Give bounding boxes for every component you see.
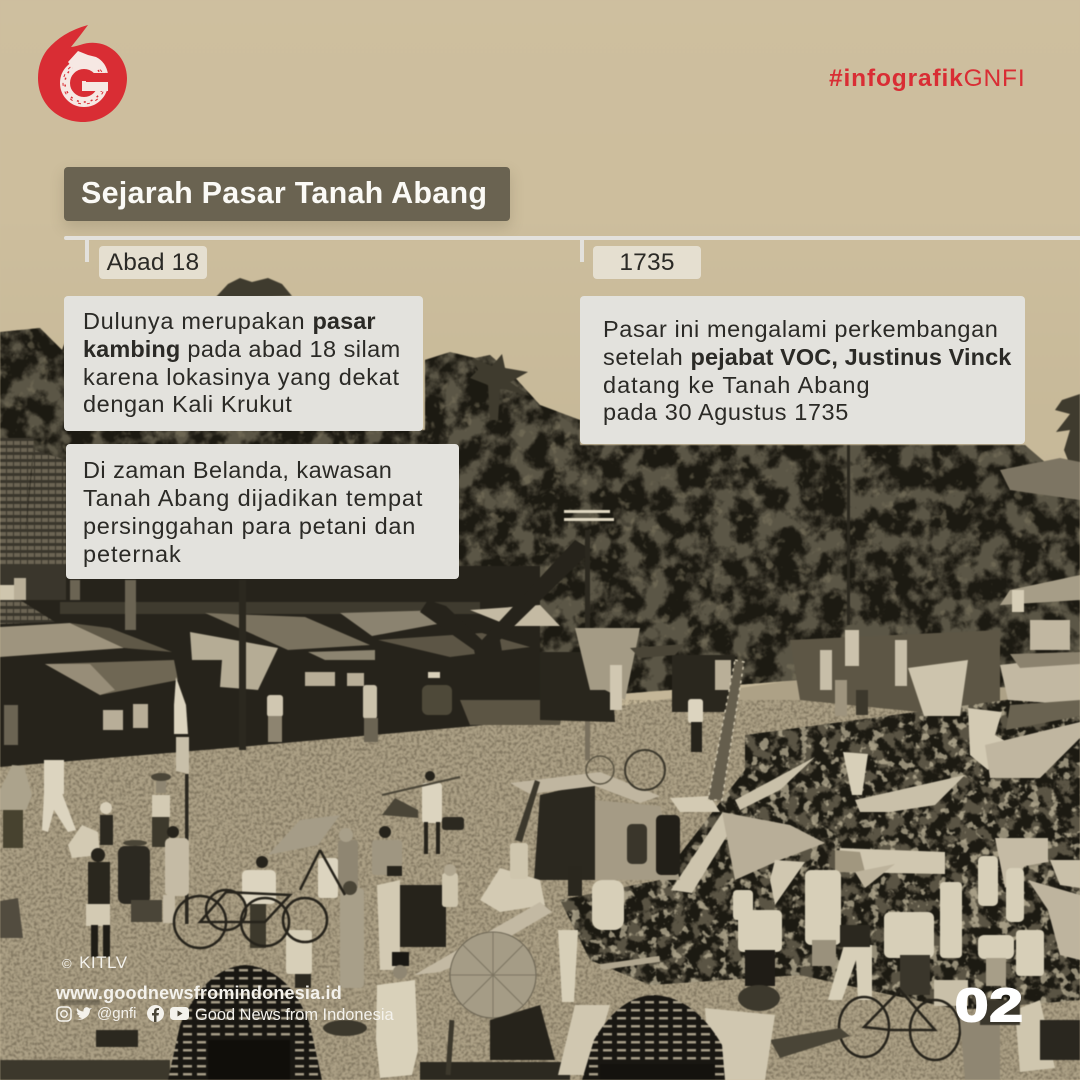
man shirtless xyxy=(91,848,105,862)
title banner xyxy=(64,167,510,221)
group at rack xyxy=(318,858,338,898)
icon: instagram xyxy=(56,1006,72,1022)
distant roof right xyxy=(1000,458,1080,500)
market group behind xyxy=(442,873,458,907)
man in robe and black peci xyxy=(376,952,418,1078)
timeline rail xyxy=(64,236,1080,262)
man at bottom right xyxy=(960,1000,1080,1080)
icon: twitter xyxy=(76,1007,92,1020)
people, left foreground xyxy=(0,750,545,988)
person under parasol xyxy=(490,1005,555,1060)
text card: zaman Belanda: persinggahan para petani dan xyxy=(83,513,416,539)
cart panels xyxy=(558,1005,775,1080)
man in long robe xyxy=(387,866,402,876)
text card: Justinus Vinck: pada 30 Agustus 1735 xyxy=(603,399,849,425)
ground xyxy=(0,640,1080,1080)
text card: pasar kambing: Dulunya merupakan pasar xyxy=(83,308,376,334)
date tag: 1735 xyxy=(593,246,701,279)
poles xyxy=(239,445,850,760)
walking man in white xyxy=(50,750,60,760)
bicycles at centre-left xyxy=(174,850,345,948)
icon: youtube xyxy=(170,1007,189,1020)
stall awnings row xyxy=(0,605,560,695)
man in dark coat xyxy=(118,846,150,904)
stall table xyxy=(400,885,446,947)
squatting man xyxy=(68,825,100,858)
foreground people, right xyxy=(558,856,1044,1006)
people standing before the left shops xyxy=(267,672,565,742)
date tag: 1735: 1735 xyxy=(619,249,675,276)
text card: pasar kambing: karena lokasinya yang dekat xyxy=(83,364,400,390)
box and bucket xyxy=(0,898,23,938)
carrier with yoke xyxy=(425,771,435,781)
eagle ring xyxy=(63,51,108,104)
man with pith helmet xyxy=(100,802,112,814)
text card: pasar kambing: dengan Kali Krukut xyxy=(83,391,292,417)
hashtag header: #infografikGNFI xyxy=(829,65,1026,92)
palms xyxy=(215,278,1080,474)
text card: pasar kambing: kambing pada abad 18 silam xyxy=(83,336,401,362)
channel name: Good News from Indonesia xyxy=(195,1006,394,1024)
hats ground parasol sketch xyxy=(268,815,340,855)
tree canopy masses xyxy=(0,328,1080,700)
text card: Justinus Vinck: setelah pejabat VOC, Justinus Vinck xyxy=(603,344,1011,370)
social media row xyxy=(56,1005,394,1024)
parasol xyxy=(414,902,552,1075)
people in the left shopfronts xyxy=(4,672,364,745)
bicycle, lower right xyxy=(839,990,960,1060)
ground shadows xyxy=(0,1000,570,1080)
text card: pasar kambing xyxy=(64,296,423,431)
text card: zaman Belanda xyxy=(66,444,459,579)
veiled woman xyxy=(0,765,32,810)
text card: zaman Belanda: Di zaman Belanda, kawasan xyxy=(83,457,392,483)
tents and tarps, right xyxy=(670,652,1080,960)
title text: Sejarah Pasar Tanah Abang xyxy=(81,176,487,210)
page number: 02 xyxy=(955,979,1024,1031)
white flag and sign xyxy=(174,677,189,924)
person by lamp post xyxy=(688,699,703,752)
tent and stall with bicycle xyxy=(510,750,680,896)
man with wide hat xyxy=(151,773,171,781)
right background crowd and dark masses xyxy=(540,575,1080,722)
text card: Justinus Vinck xyxy=(580,296,1025,444)
icon: facebook xyxy=(147,1005,164,1022)
text card: Justinus Vinck: Pasar ini mengalami perkembangan xyxy=(603,316,998,342)
handle text: @gnfi xyxy=(97,1005,136,1022)
website url: www.goodnewsfromindonesia.id xyxy=(56,983,342,1003)
tree trunk xyxy=(420,540,592,685)
text card: Justinus Vinck: datang ke Tanah Abang xyxy=(603,372,871,398)
photo credit: © KITLV xyxy=(62,953,128,972)
logo: GNFI red emblem xyxy=(38,25,127,122)
man with white shirt at bicycles xyxy=(256,856,268,868)
date tag: Abad 18: Abad 18 xyxy=(107,249,199,276)
text card: zaman Belanda: peternak xyxy=(83,541,182,567)
woven baskets xyxy=(168,965,725,1080)
man by pole xyxy=(165,838,189,896)
left building with tiled roof xyxy=(0,438,540,767)
right crowd mass xyxy=(560,690,1080,1010)
bowl and dark shadow on ground xyxy=(738,985,780,1011)
text card: zaman Belanda: Tanah Abang dijadikan tempat xyxy=(83,485,423,511)
decorated pole xyxy=(708,660,744,800)
